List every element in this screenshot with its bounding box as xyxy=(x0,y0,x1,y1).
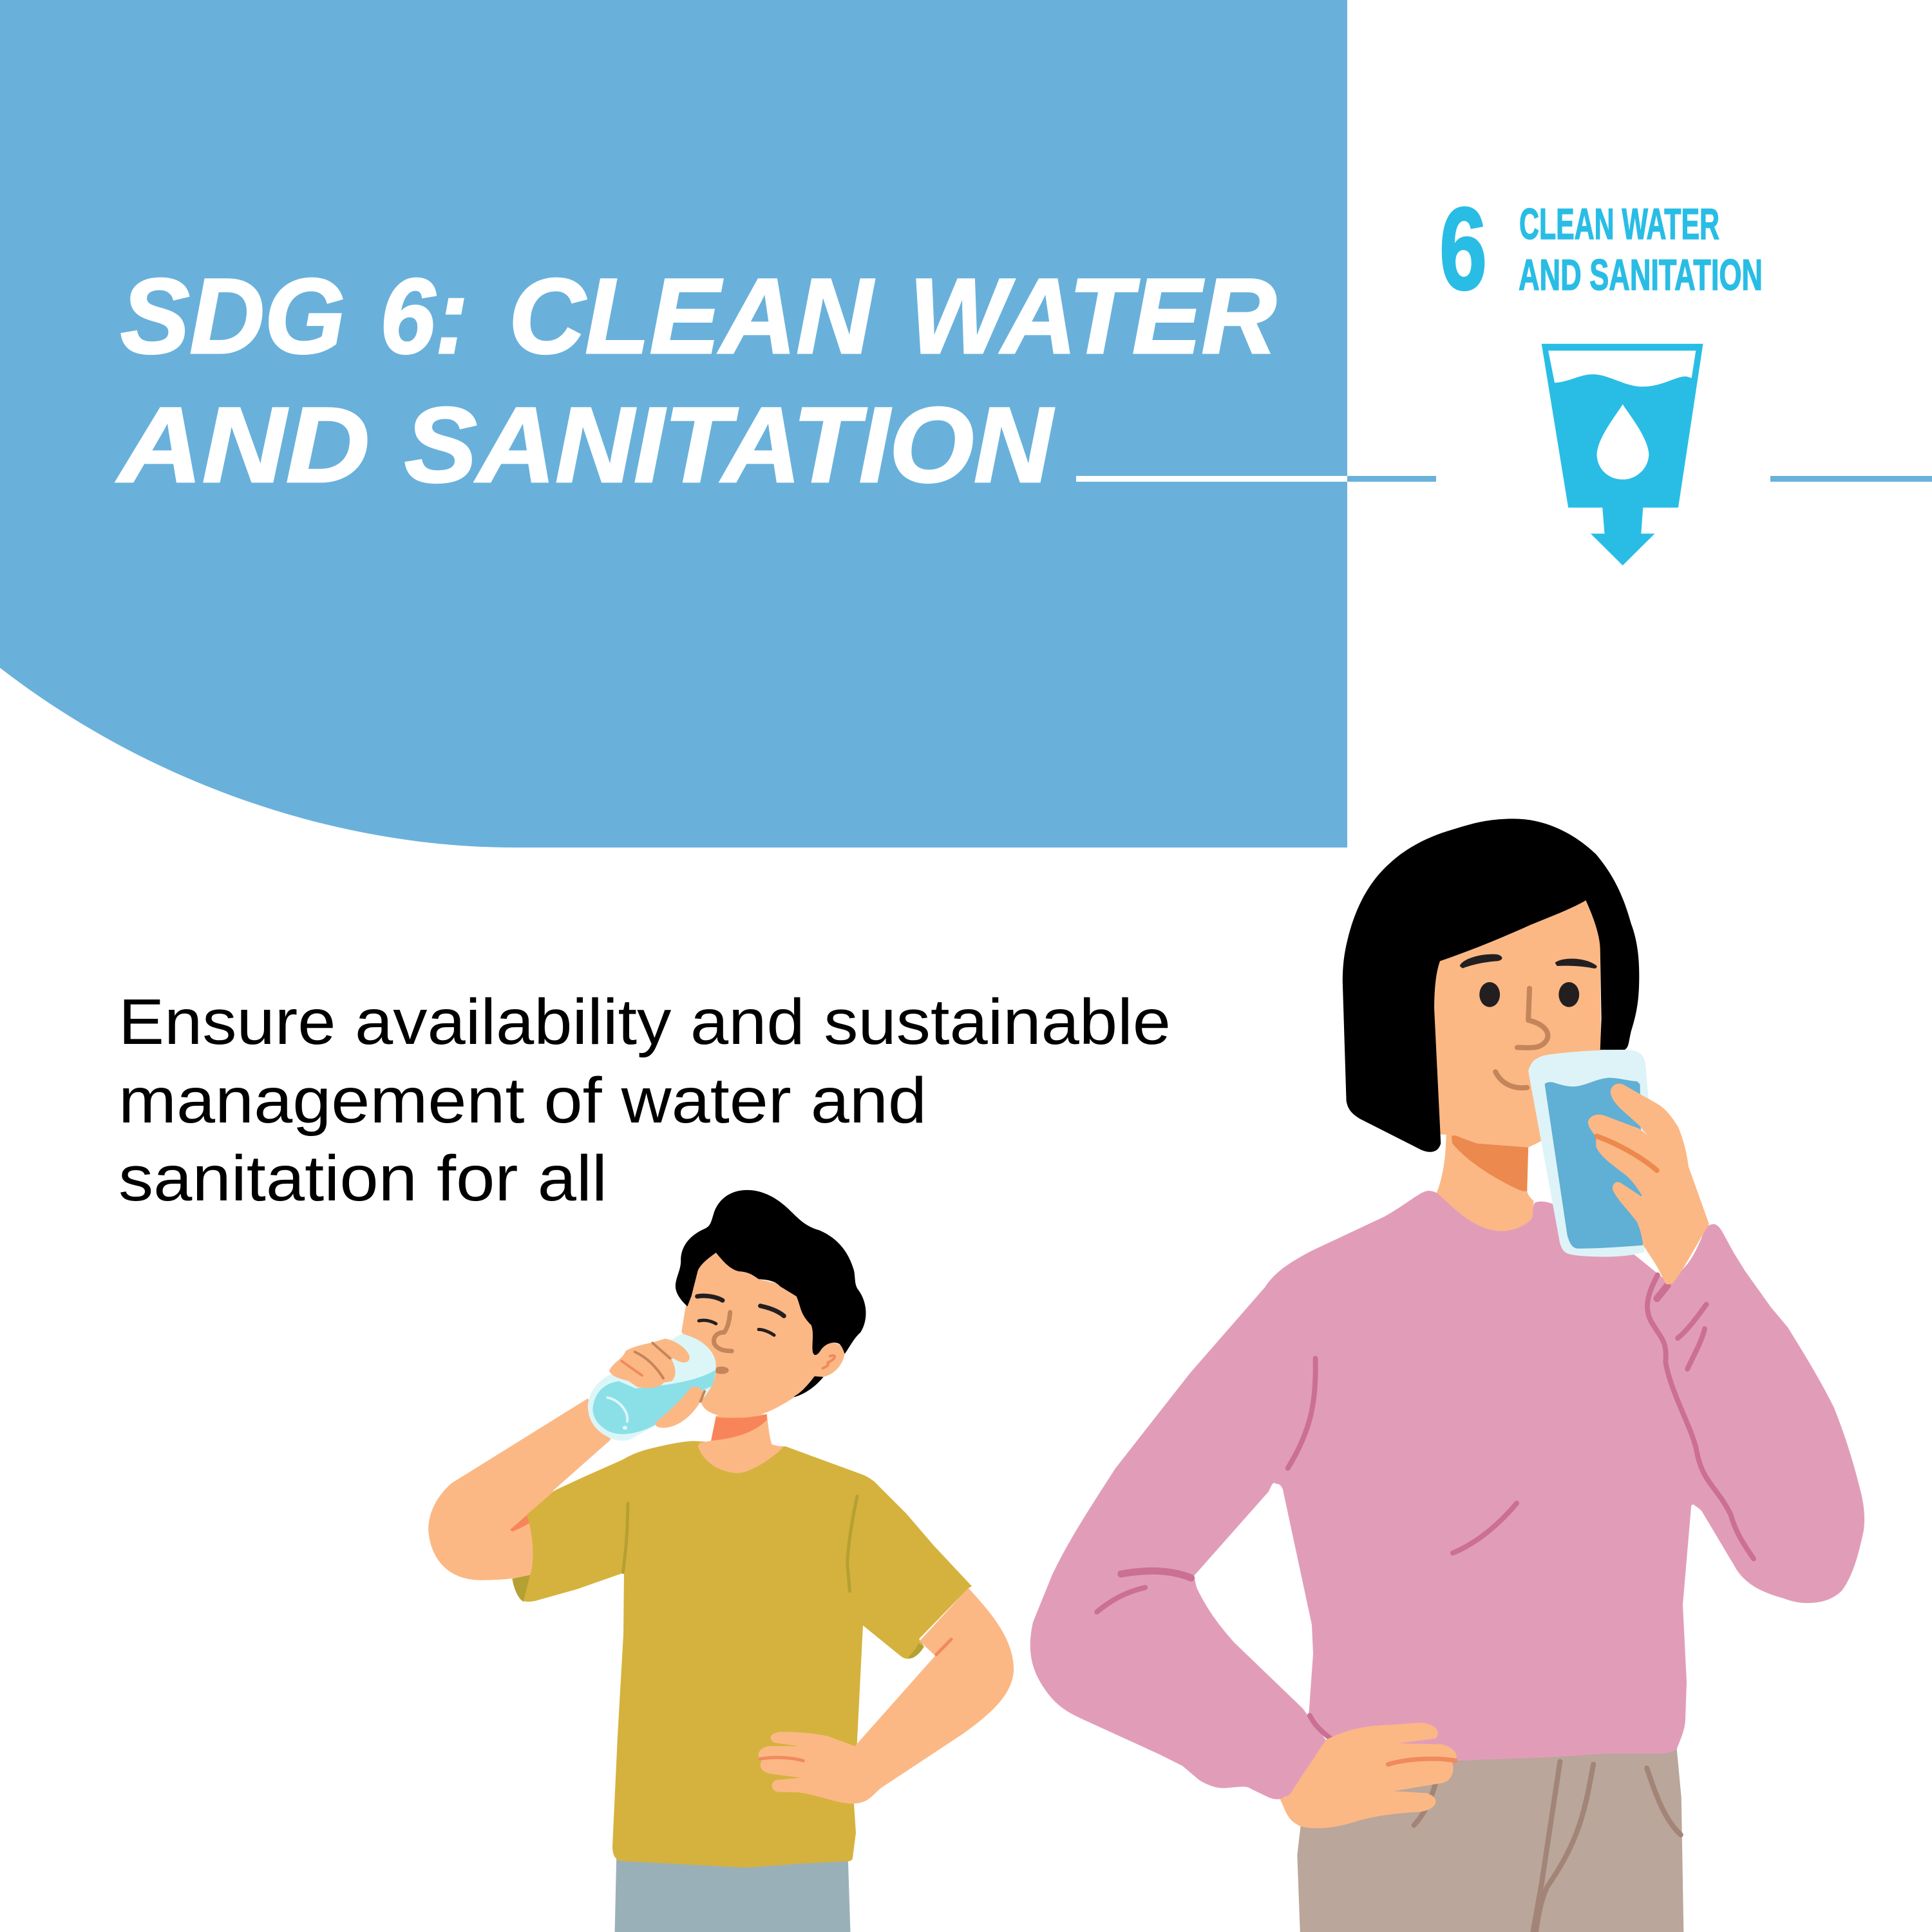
woman finger crease xyxy=(1597,1136,1657,1170)
description text: sanitation for all xyxy=(118,1142,607,1215)
boy glass water xyxy=(592,1370,716,1434)
boy sleeve shade right xyxy=(908,1643,924,1658)
woman neck xyxy=(1437,1132,1533,1231)
panel: blue header xyxy=(0,0,1347,848)
title: CLEAN xyxy=(509,257,875,376)
woman eyebrows xyxy=(1460,954,1597,969)
boy neck shadow xyxy=(711,1414,767,1441)
woman pink sweater xyxy=(1030,1191,1864,1799)
woman glass xyxy=(1528,1050,1649,1257)
badge: SDG 6 label: 6 xyxy=(1439,183,1487,314)
woman hair xyxy=(1343,819,1639,1152)
badge: SDG 6 label: AND SANITATION xyxy=(1519,251,1763,299)
description text: management of water and xyxy=(118,1065,927,1137)
title: WATER xyxy=(909,257,1276,376)
boy ear line xyxy=(823,1356,835,1368)
boy shirt folds xyxy=(623,1496,857,1591)
woman eyes xyxy=(1479,982,1579,1007)
woman glass water xyxy=(1545,1077,1643,1249)
description text xyxy=(118,986,1171,1215)
boy sleeve shade xyxy=(512,1575,532,1602)
boy t-shirt xyxy=(524,1441,972,1868)
boy head xyxy=(588,1190,866,1473)
illustration: woman drinking xyxy=(1030,819,1864,1932)
title rule, white on panel and blue beyond xyxy=(1076,476,1932,482)
title: AND xyxy=(116,386,370,505)
woman hand on hip xyxy=(1280,1716,1457,1828)
woman sweater folds xyxy=(1097,1275,1754,1612)
badge: SDG 6 label xyxy=(1439,183,1763,314)
boy right arm and hand xyxy=(759,1588,1014,1804)
woman nose xyxy=(1517,989,1548,1048)
boy nose xyxy=(714,1312,732,1351)
boy hair nape xyxy=(794,1376,824,1397)
woman face xyxy=(1428,900,1601,1148)
woman head and drinking hand xyxy=(1343,819,1709,1284)
badge: SDG 6 label: CLEAN WATER xyxy=(1519,200,1719,249)
boy raised arm xyxy=(428,1398,611,1580)
boy glass xyxy=(588,1334,716,1441)
woman neck shadow xyxy=(1452,1135,1528,1191)
boy elbow crease xyxy=(510,1515,529,1531)
title: 6: xyxy=(380,257,468,376)
title xyxy=(116,257,1276,505)
boy eyebrows and closed eyes xyxy=(697,1296,784,1335)
boy glass highlight xyxy=(607,1397,627,1430)
woman hand xyxy=(1588,1084,1709,1284)
boy hand on glass xyxy=(609,1339,690,1388)
boy thumb xyxy=(655,1387,703,1428)
boy face and ear xyxy=(681,1253,845,1417)
woman smile xyxy=(1495,1072,1527,1088)
boy mouth xyxy=(714,1367,729,1374)
title: SANITATION xyxy=(404,386,1054,505)
boy hair xyxy=(676,1190,866,1355)
illustration: boy drinking xyxy=(428,1190,1014,1932)
boy trousers xyxy=(615,1855,850,1932)
woman trousers xyxy=(1297,1748,1683,1932)
description text: Ensure availability and sustainable xyxy=(118,986,1171,1058)
boy neck xyxy=(698,1414,783,1473)
icon: water glass with drop and arrow xyxy=(1542,344,1703,565)
boy finger creases xyxy=(621,1343,705,1401)
title: SDG xyxy=(120,257,345,376)
woman trouser seams xyxy=(1414,1761,1681,1932)
